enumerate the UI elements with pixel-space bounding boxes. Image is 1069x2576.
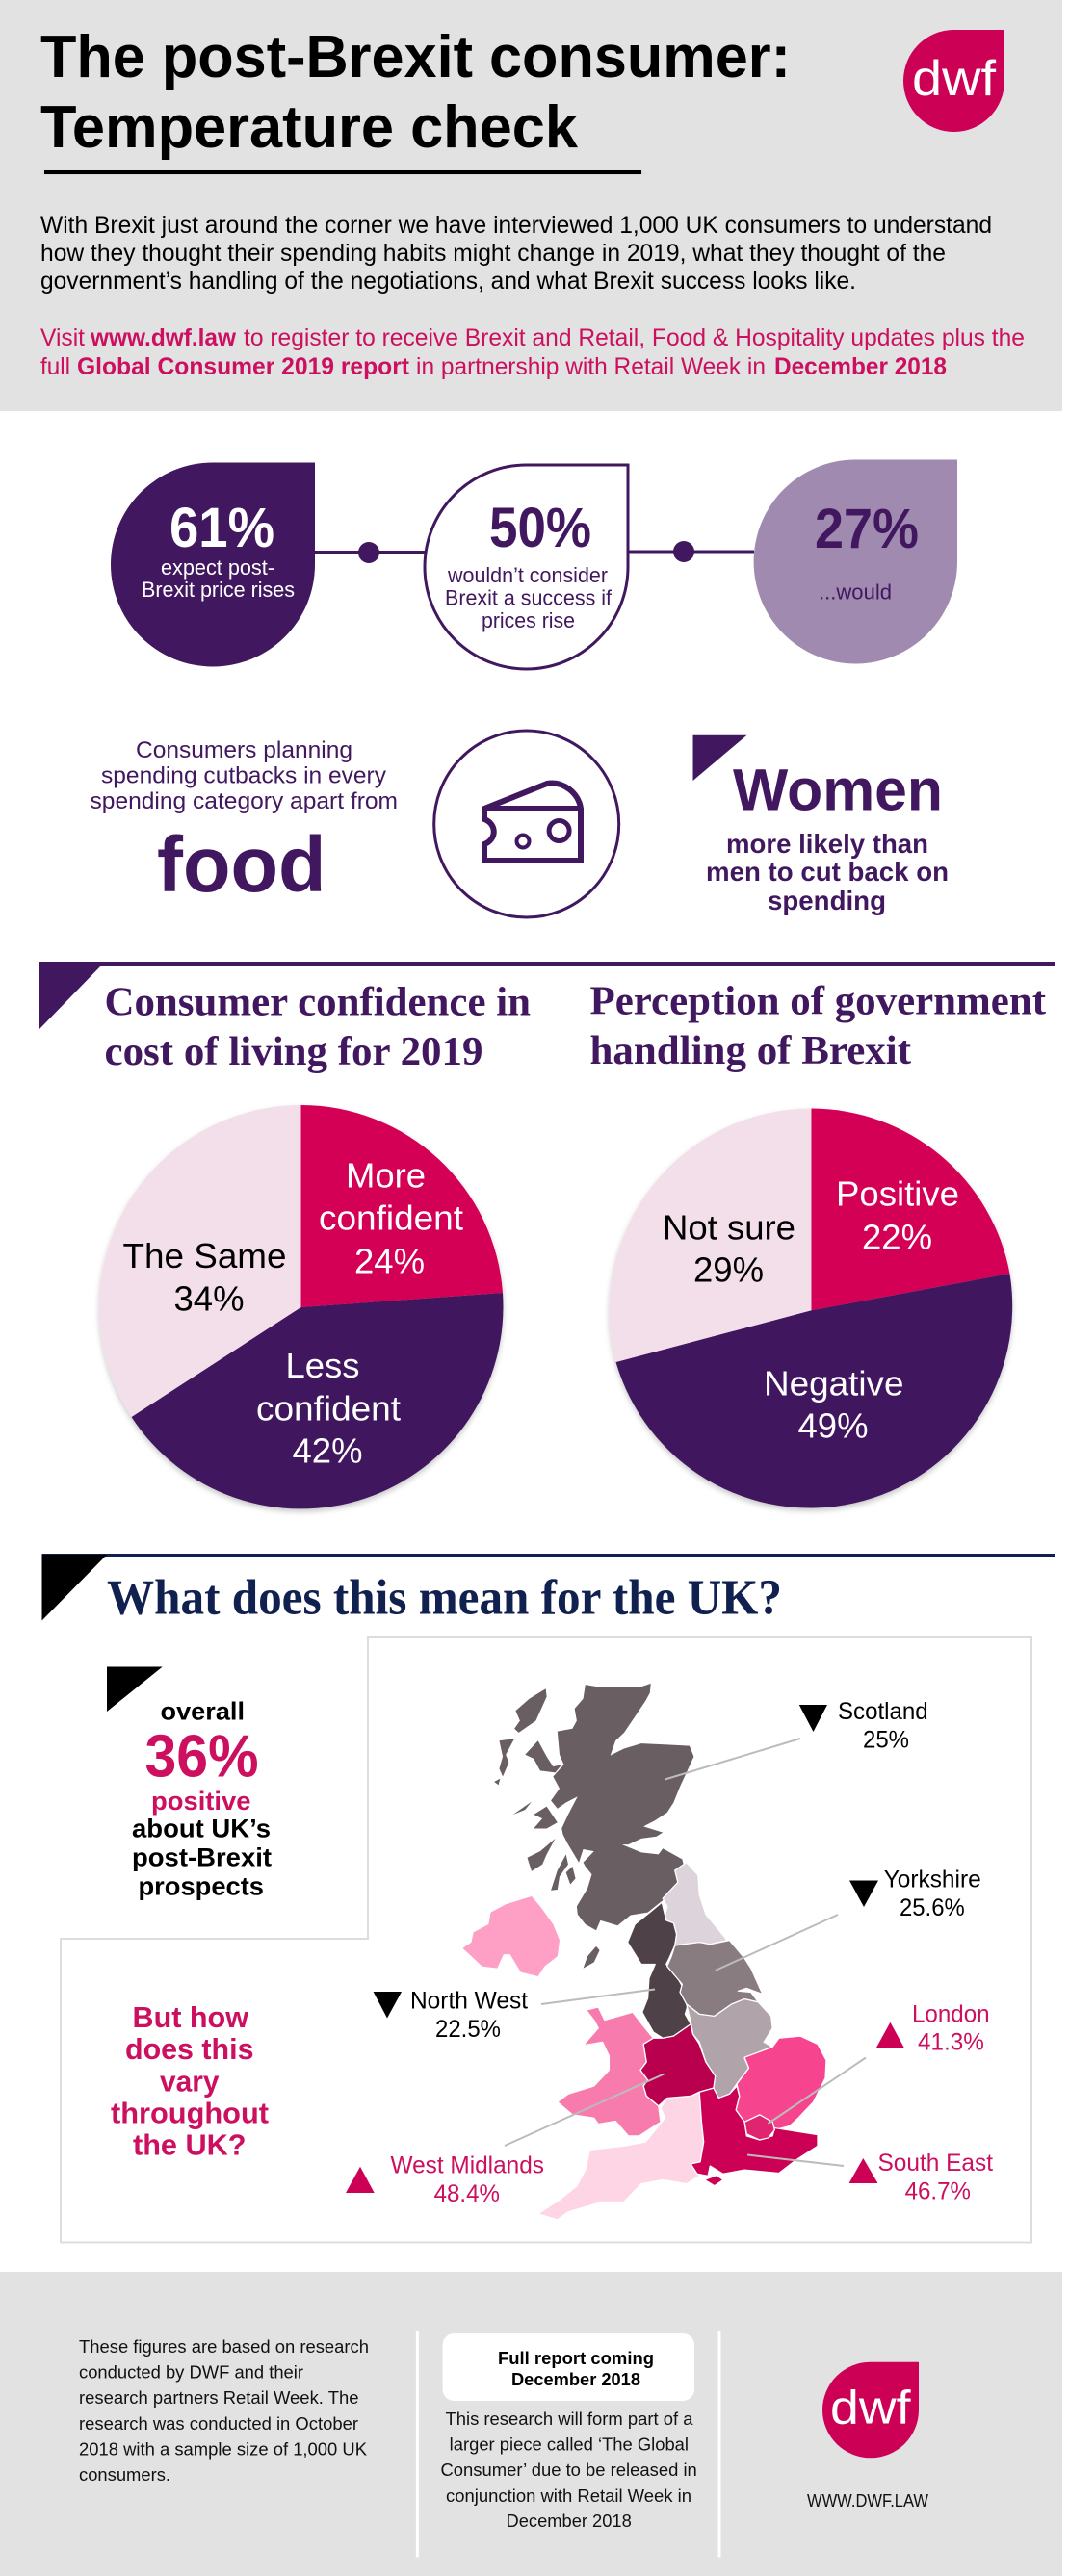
map label: South East [849,2150,993,2204]
callout: women more likely: spending [768,886,886,915]
logo: dwf footer [822,2362,919,2458]
panel: footer [0,2272,1062,2576]
panel: map outline [61,1637,1031,2243]
heading: perception of government: Perception of government [589,980,1046,1024]
logo: dwf: dwf [912,51,997,107]
map label: London [876,2000,990,2056]
map label: Scotland: 25% [863,1727,909,1754]
map label: West Midlands: 48.4% [434,2180,500,2207]
logo: dwf footer: dwf [830,2383,911,2434]
footer: research note: research partners Retail Week. The [79,2388,358,2408]
heading: consumer confidence [104,980,531,1074]
section header: what does this mean for the UK [42,1554,1055,1625]
map label: Yorkshire: 25.6% [900,1894,965,1921]
stat: 61% expect price rises: expect post- [161,555,274,580]
stat: 61% expect price rises: 61% [169,497,274,559]
footer: global consumer note: conjunction with Retail Week in [446,2486,691,2506]
call to action text: Visit [40,324,85,351]
label: not sure: 29% [693,1249,764,1290]
footer: research note: 2018 with a sample size of 1,000 UK [79,2439,367,2459]
text: food spending: Consumers planning [136,737,352,763]
intro text: how they thought their spending habits might change in 2019, what they thought of the [40,240,946,267]
intro text [40,212,992,295]
stat: 27% would: 27% [815,498,919,560]
label: more confident: More [346,1155,426,1196]
callout: overall 36% positive: about UK’s [132,1814,271,1842]
label: negative: Negative [764,1363,903,1404]
map label: North West: North West [410,1987,528,2014]
call to action text: in partnership with Retail Week in [416,353,766,380]
heading: consumer confidence: Consumer confidence in [104,980,531,1024]
region: East of England [736,2036,826,2130]
region: North West [628,1902,691,2038]
intro text: government’s handling of the negotiations, and what Brexit success looks like. [40,268,856,295]
call to action text: December 2018 [774,353,947,380]
callout: overall 36% positive [107,1667,272,1900]
region: North East [663,1863,727,1945]
map label: South East: South East [878,2150,993,2177]
region: Yorkshire [667,1941,763,2016]
title [40,24,791,161]
callout: overall 36% positive: 36% [144,1723,258,1790]
call to action text: full [40,353,70,380]
label: not sure [663,1207,795,1290]
callout: women more likely: more likely than [726,829,928,859]
footer: research note [79,2337,369,2485]
text: food spending: spending category apart from [91,788,398,814]
label: more confident: confident [319,1198,463,1238]
callout: women more likely: Women [733,757,943,822]
footer: full report box: December 2018 [511,2370,640,2389]
callout: women more likely: men to cut back on [706,857,949,887]
callout: overall 36% positive: positive [151,1787,250,1816]
footer: research note: consumers. [79,2465,170,2485]
label: positive: Positive [836,1174,959,1213]
heading: perception of government [589,980,1046,1073]
stat: 61% expect price rises [111,462,315,667]
label: the same: 34% [173,1278,245,1319]
footer: research note: research was conducted in October [79,2414,358,2434]
call to action text: to register to receive Brexit and Retail, Food & Hospitality updates plus the [244,324,1025,351]
map label: Yorkshire: Yorkshire [884,1866,981,1893]
icon: cheese in circle [434,731,619,917]
label: the same [123,1236,287,1319]
section header: what does this mean for the UK: What does this mean for the UK? [107,1571,782,1625]
footer: global consumer note: This research will form part of a [445,2409,694,2429]
pie chart: consumer confidence [99,1105,503,1508]
region: West Midlands [640,2024,716,2106]
stat: 27% would: ...would [819,580,892,605]
stat: 27% would [754,460,957,664]
text: but how does this vary: vary [160,2064,220,2099]
footer: global consumer note: Consumer’ due to be released in [441,2460,697,2480]
panel: header [0,0,1062,411]
label: less confident [256,1346,401,1471]
map label: Scotland [799,1698,928,1754]
callout: overall 36% positive: post-Brexit [132,1842,272,1871]
map label: South East: 46.7% [905,2177,971,2204]
stat: 50% wouldn't consider success: wouldn’t consider [447,563,608,587]
map label: London: 41.3% [918,2029,984,2056]
footer: research note: These figures are based on research [79,2337,369,2357]
text: but how does this vary: does this [125,2032,254,2066]
footer: global consumer note [441,2409,697,2531]
map label: North West [374,1987,528,2043]
region: Wales [558,2007,661,2136]
label: less confident: confident [256,1388,401,1429]
call to action text: www.dwf.law [90,324,237,351]
logo: dwf [903,30,1004,132]
text: but how does this vary: throughout [111,2097,269,2129]
map label: West Midlands: West Midlands [391,2152,544,2179]
label: positive [836,1174,959,1257]
label: the same: The Same [123,1236,287,1275]
label: more confident: 24% [354,1242,425,1280]
stat: 61% expect price rises: Brexit price rises [142,578,295,602]
text: but how does this vary: But how [133,2000,249,2034]
stat: 50% wouldn't consider success: prices rise [482,608,575,632]
region: Scotland [494,1684,693,1969]
call to action text [40,324,1025,380]
intro text: With Brexit just around the corner we have interviewed 1,000 UK consumers to understand [40,212,992,239]
heading: perception of government: handling of Brexit [589,1029,911,1073]
callout: women more likely [693,735,949,915]
heading: consumer confidence: cost of living for 2019 [104,1030,483,1074]
region: London [744,2115,774,2140]
text: but how does this vary [111,2000,269,2162]
callout: overall 36% positive: overall [160,1696,245,1725]
connectors between stat drops [315,541,754,563]
footer: website: WWW.DWF.LAW [807,2491,928,2511]
leader lines [505,1739,866,2166]
text: food spending: food [157,821,326,909]
label: positive: 22% [862,1217,932,1257]
label: less confident: 42% [293,1430,362,1471]
stat: 50% wouldn't consider success: Brexit a success if [445,585,613,610]
footer: global consumer note: December 2018 [507,2512,632,2531]
label: negative [764,1363,903,1446]
section header: purple rule and marker [39,962,1055,1029]
label: negative: 49% [797,1405,869,1446]
stat: 50% wouldn't consider success: 50% [489,497,591,559]
label: not sure: Not sure [663,1207,795,1248]
map label: West Midlands [346,2152,544,2207]
region: South West [538,2092,704,2220]
footer: full report box: Full report coming [498,2349,654,2368]
map label: Scotland: Scotland [838,1698,928,1725]
label: more confident [319,1155,463,1280]
map label: London: London [912,2000,990,2027]
region: Northern Ireland [463,1896,560,1976]
text: but how does this vary: the UK? [133,2127,247,2162]
footer: research note: conducted by DWF and their [79,2362,303,2382]
map label: Yorkshire [849,1866,981,1921]
call to action text: Global Consumer 2019 report [77,353,410,380]
region: East Midlands [687,1999,772,2098]
map label: North West: 22.5% [435,2016,501,2043]
map: UK regions [463,1684,826,2220]
stat: 50% wouldn't consider success [425,465,628,669]
text: food spending: spending cutbacks in every [101,762,386,789]
callout: overall 36% positive: prospects [139,1871,264,1900]
footer: global consumer note: larger piece called ‘The Global [450,2435,689,2455]
region: South East [691,2086,818,2185]
title: The post-Brexit consumer: [40,24,791,90]
label: less confident: Less [285,1346,360,1385]
text: food spending [91,737,398,909]
title: Temperature check [40,94,579,161]
footer: full report box [443,2333,694,2401]
pie chart: perception of government [610,1109,1012,1508]
